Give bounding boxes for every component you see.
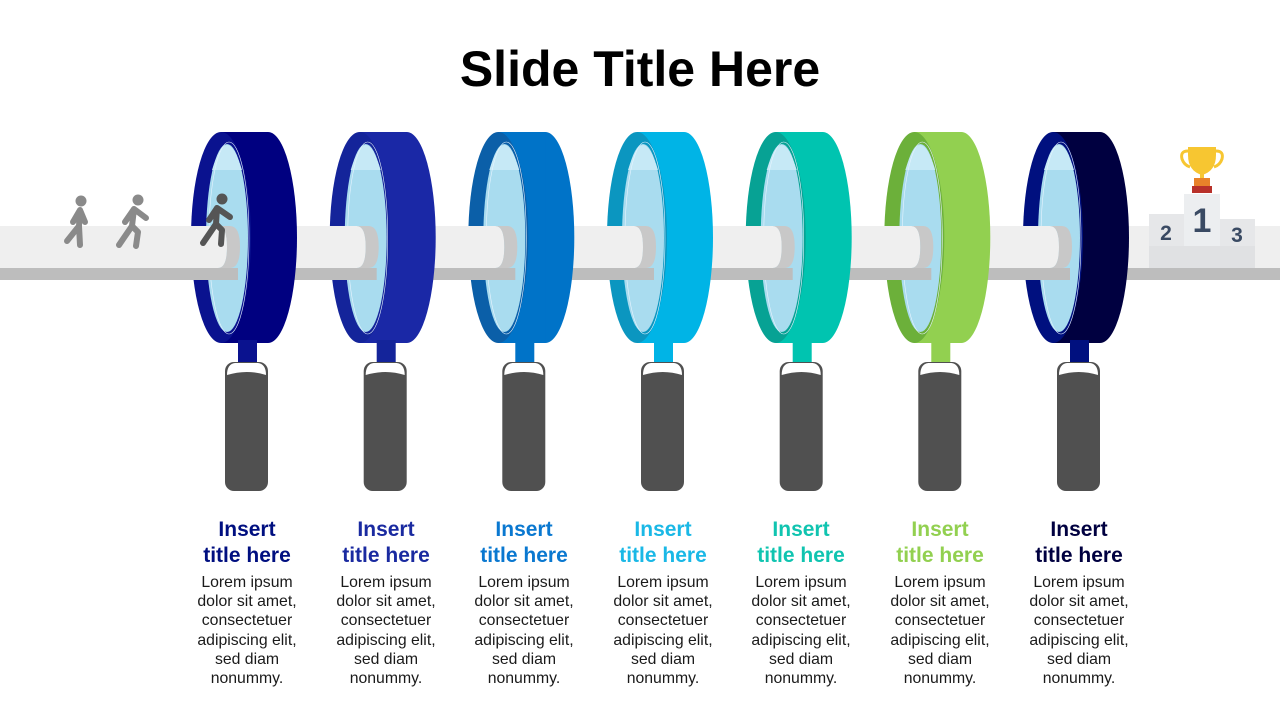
text block 6: Lorem ipsum (894, 574, 986, 591)
text block 6 (890, 518, 990, 687)
text block 7: title here (1035, 544, 1123, 567)
text block 3: nonummy. (488, 670, 560, 687)
text block 1: consectetuer (202, 612, 292, 629)
text block 3 (474, 518, 574, 687)
text block 2: adipiscing elit, (336, 632, 436, 649)
text block 2: consectetuer (341, 612, 431, 629)
magnifier 2 (298, 132, 436, 491)
text block 2: Insert (357, 518, 415, 541)
text block 7: Lorem ipsum (1033, 574, 1125, 591)
title: Slide Title Here (460, 41, 820, 97)
text block 6: consectetuer (895, 612, 985, 629)
text block 5: nonummy. (765, 670, 837, 687)
text block 1: sed diam (215, 651, 279, 668)
text block 7: consectetuer (1034, 612, 1124, 629)
text block 7 (1029, 518, 1129, 687)
text block 2: dolor sit amet, (336, 593, 436, 610)
text block 3: title here (480, 544, 568, 567)
text block 5: adipiscing elit, (751, 632, 851, 649)
icon: walker in lens (203, 194, 230, 244)
text block 3: consectetuer (479, 612, 569, 629)
road bar (0, 226, 1280, 280)
text block 5: dolor sit amet, (751, 593, 851, 610)
text block 1: dolor sit amet, (197, 593, 297, 610)
text block 4: dolor sit amet, (613, 593, 713, 610)
podium: 3 (1231, 224, 1243, 247)
text block 2 (336, 518, 436, 687)
text block 1: Lorem ipsum (201, 574, 293, 591)
text block 7: nonummy. (1043, 670, 1115, 687)
text block 1: Insert (218, 518, 276, 541)
magnifier 6 (852, 132, 990, 491)
podium: 1 (1193, 202, 1211, 240)
text block 2: sed diam (354, 651, 418, 668)
text block 7: adipiscing elit, (1029, 632, 1129, 649)
text block 2: nonummy. (350, 670, 422, 687)
icon: trophy (1182, 147, 1222, 193)
text block 5: sed diam (769, 651, 833, 668)
text block 4: sed diam (631, 651, 695, 668)
text block 3: dolor sit amet, (474, 593, 574, 610)
text block 6: sed diam (908, 651, 972, 668)
text block 7: sed diam (1047, 651, 1111, 668)
text block 1: nonummy. (211, 670, 283, 687)
text block 3: adipiscing elit, (474, 632, 574, 649)
podium (1149, 194, 1255, 268)
text block 6: nonummy. (904, 670, 976, 687)
text block 4: consectetuer (618, 612, 708, 629)
text block 6: Insert (911, 518, 969, 541)
magnifier 5 (714, 132, 852, 491)
text block 3: Insert (495, 518, 553, 541)
text block 5: Insert (772, 518, 830, 541)
text block 5: Lorem ipsum (755, 574, 847, 591)
magnifier 7 (991, 132, 1129, 491)
text block 4: nonummy. (627, 670, 699, 687)
text block 4: title here (619, 544, 707, 567)
text block 2: title here (342, 544, 430, 567)
icon: walkers (67, 194, 146, 246)
text block 6: dolor sit amet, (890, 593, 990, 610)
text block 7: dolor sit amet, (1029, 593, 1129, 610)
text block 3: Lorem ipsum (478, 574, 570, 591)
magnifier 1 (0, 132, 297, 491)
text block 4: adipiscing elit, (613, 632, 713, 649)
text block 6: title here (896, 544, 984, 567)
text block 4: Lorem ipsum (617, 574, 709, 591)
text block 5: consectetuer (756, 612, 846, 629)
text block 5: title here (757, 544, 845, 567)
magnifier 4 (575, 132, 713, 491)
text block 1: title here (203, 544, 291, 567)
text block 4 (613, 518, 713, 687)
text block 6: adipiscing elit, (890, 632, 990, 649)
text block 1 (197, 518, 297, 687)
magnifier 3 (436, 132, 574, 491)
text block 1: adipiscing elit, (197, 632, 297, 649)
text block 3: sed diam (492, 651, 556, 668)
text block 2: Lorem ipsum (340, 574, 432, 591)
text block 7: Insert (1050, 518, 1108, 541)
podium: 2 (1160, 222, 1172, 245)
text block 4: Insert (634, 518, 692, 541)
text block 5 (751, 518, 851, 687)
